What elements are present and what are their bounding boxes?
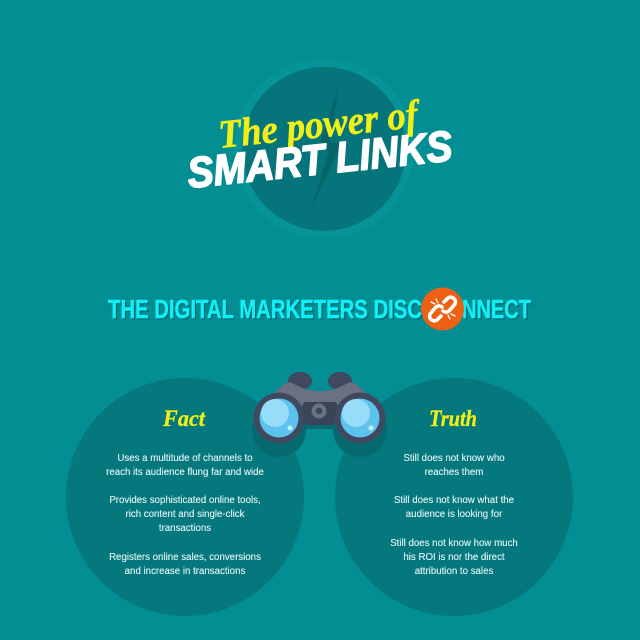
heading: fact: Fact bbox=[162, 406, 206, 431]
heading: the digital marketers disconnect: NNECT bbox=[464, 296, 533, 326]
text: fact statements: Provides sophisticated online tools, bbox=[109, 495, 261, 506]
text: truth statements: reaches them bbox=[425, 467, 483, 478]
emblem: title circle with lightning bolt bbox=[234, 59, 414, 239]
heading: the digital marketers disconnect: THE DIGITAL MARKETERS DISC bbox=[108, 294, 422, 324]
text: fact statements: and increase in transactions bbox=[125, 566, 245, 577]
text: truth statements: his ROI is nor the direct bbox=[403, 552, 505, 563]
panel: fact bbox=[66, 378, 304, 616]
text: truth statements: Still does not know how much bbox=[390, 538, 518, 549]
text: truth statements bbox=[390, 453, 518, 577]
heading: the digital marketers disconnect: NNECT bbox=[462, 294, 531, 324]
text: fact statements: transactions bbox=[159, 523, 211, 534]
title: SMART LINKS: SMART LINKS bbox=[185, 122, 455, 198]
heading: the digital marketers disconnect: THE DIGITAL MARKETERS DISC bbox=[110, 296, 424, 326]
text: truth statements: audience is looking for bbox=[406, 509, 503, 520]
title: The power of: The power of bbox=[216, 91, 423, 157]
text: truth statements: attribution to sales bbox=[415, 566, 493, 577]
text: truth statements: Still does not know who bbox=[403, 453, 505, 464]
icon: broken link bbox=[421, 288, 464, 330]
text: fact statements: Registers online sales, conversions bbox=[109, 552, 261, 563]
text: fact statements: Uses a multitude of channels to bbox=[117, 453, 253, 464]
text: fact statements bbox=[106, 453, 264, 577]
text: truth statements: Still does not know what the bbox=[394, 495, 514, 506]
heading: truth: Truth bbox=[429, 406, 477, 431]
panel: truth bbox=[335, 378, 573, 616]
icon: binoculars bbox=[252, 372, 387, 457]
text: fact statements: rich content and single-click bbox=[126, 509, 245, 520]
text: fact statements: reach its audience flung far and wide bbox=[106, 467, 264, 478]
